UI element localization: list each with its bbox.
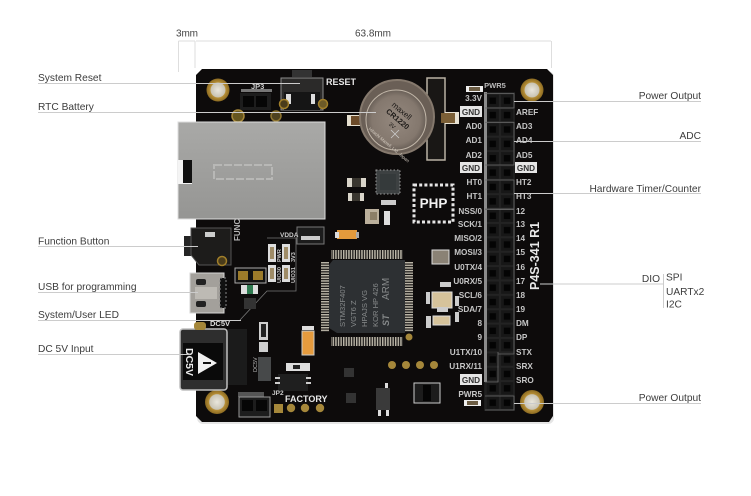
header labels left: HT0 [467,178,482,187]
header labels left: GND [462,164,480,173]
header labels left: AD0 [466,122,482,131]
header labels right: 16 [516,263,526,272]
stm32 microcontroller: VGT6 Z [349,300,358,327]
callout: dio: UARTx2 [666,287,705,298]
callout: dio: SPI [666,272,682,284]
header labels left: HT1 [467,192,482,201]
jp3 header: JP3 [251,82,264,91]
callout: dio: I2C [666,300,682,310]
header labels left: SCK/1 [458,220,482,229]
header labels left: NSS/0 [458,207,482,216]
header labels right: AD3 [516,122,533,131]
header labels left: MISO/2 [454,234,482,243]
orange capacitor [302,326,314,355]
header labels left: 9 [477,333,482,342]
pin header [484,92,515,411]
function button: FUNC [233,219,242,241]
header labels right: AD4 [516,136,533,145]
header labels right: DM [516,319,529,328]
header labels right: STX [516,348,532,357]
usb port [190,273,226,313]
small qfn chip [376,170,400,194]
header labels left: GND [462,376,480,385]
callout: system user led: System/User LED [38,310,119,321]
header labels right: PWR5 [484,81,506,90]
callout: rtc battery: RTC Battery [38,102,95,113]
dimension lines: 63.8mm [355,28,391,40]
header labels right: AD5 [516,151,533,160]
jp3 header [240,82,272,110]
header labels left: PWR5 [458,390,482,399]
board name: P4S-341 R1 [528,222,542,290]
header labels right [484,81,538,385]
header labels right: HT3 [516,192,532,201]
callout: adc: ADC [679,131,701,142]
stm32 microcontroller: KOR HP 426 [371,283,380,327]
php logo [414,185,453,222]
jp2 header: JP2 [272,390,284,397]
status leds: UIO31 [291,267,297,283]
php logo: PHP [420,196,447,211]
stm32 microcontroller: HPAJS VG [360,290,369,327]
header labels left: MOSI/3 [454,248,482,257]
header labels right: SRO [516,376,534,385]
header labels right: 19 [516,305,526,314]
stm32 microcontroller: STM32F407 [338,285,347,327]
factory pads [274,394,328,413]
header labels right: HT2 [516,178,532,187]
header labels left: 8 [477,319,482,328]
dc 5v jack [180,319,247,390]
rtc battery: CR1220 [384,107,411,131]
callout: system reset: System Reset [38,73,102,84]
header labels left: U0TX/4 [454,263,482,272]
small passive components [347,178,396,225]
function button [184,219,242,266]
callout: power output top: Power Output [639,91,701,102]
reset button: RESET [326,77,357,87]
header labels left: 3.3V [465,94,483,103]
header labels left: AD1 [466,136,482,145]
solder pads above ethernet [232,110,373,126]
header labels right: DP [516,333,528,342]
header labels left: GND [462,108,480,117]
callout: usb for programming: USB for programming [38,282,137,293]
rtc battery: maxell [390,100,414,122]
header labels right: 14 [516,234,526,243]
header labels left: SDA/7 [458,305,482,314]
dimension lines: 3mm [176,28,198,40]
callout: dc 5v input: DC 5V Input [38,344,94,355]
rtc battery: 3V [387,122,396,131]
factory pads: FACTORY [285,394,328,404]
callout: power output bottom: Power Output [639,393,701,404]
status leds [240,238,297,320]
header labels left: U1TX/10 [450,348,482,357]
status leds: PWR [277,249,283,262]
factory pads left [388,361,438,369]
mounting holes [205,78,544,414]
power regulator and diodes: DC5V [253,357,259,372]
header labels right: 13 [516,220,526,229]
status leds: 3V3 [291,252,297,262]
header labels right: 18 [516,291,526,300]
callout: hardware timer counter: Hardware Timer/Counter [589,184,702,195]
header labels left: SCL/6 [459,291,482,300]
dc 5v jack: DC5V [183,348,195,376]
header labels right: AREF [516,108,538,117]
rtc battery: Hitachi Maxell, Ltd. Japan [368,126,411,164]
stm32 microcontroller: ST [381,313,391,326]
callout: dio [540,272,705,310]
header labels right: 15 [516,248,526,257]
header labels right: SRX [516,362,533,371]
power regulator and diodes [253,322,311,391]
gold pads and green led [235,268,266,309]
rtc battery [360,78,459,164]
jp2 header [238,390,284,417]
pcb board [196,69,554,424]
header labels right: 12 [516,207,526,216]
right side components [406,250,459,340]
status leds: UIO30 [277,267,283,283]
header labels left: U0RX/5 [453,277,482,286]
dc 5v jack: DC5V [210,319,230,328]
header labels right: GND [517,164,535,173]
lower transistors and ic [344,368,440,416]
callout: dio: DIO [642,274,660,285]
header labels right: 17 [516,277,526,286]
header labels left: U1RX/11 [449,362,482,371]
vdda jumper and capacitor: VDDA [280,232,299,239]
reset button [280,70,357,110]
callout: function button: Function Button [38,236,109,248]
header labels left [449,86,483,406]
ethernet jack [178,122,325,219]
dimension lines [176,28,552,72]
vdda jumper and capacitor [280,227,359,244]
header labels left: AD2 [466,151,482,160]
stm32 microcontroller [321,250,413,346]
stm32 microcontroller: ARM [381,278,392,300]
